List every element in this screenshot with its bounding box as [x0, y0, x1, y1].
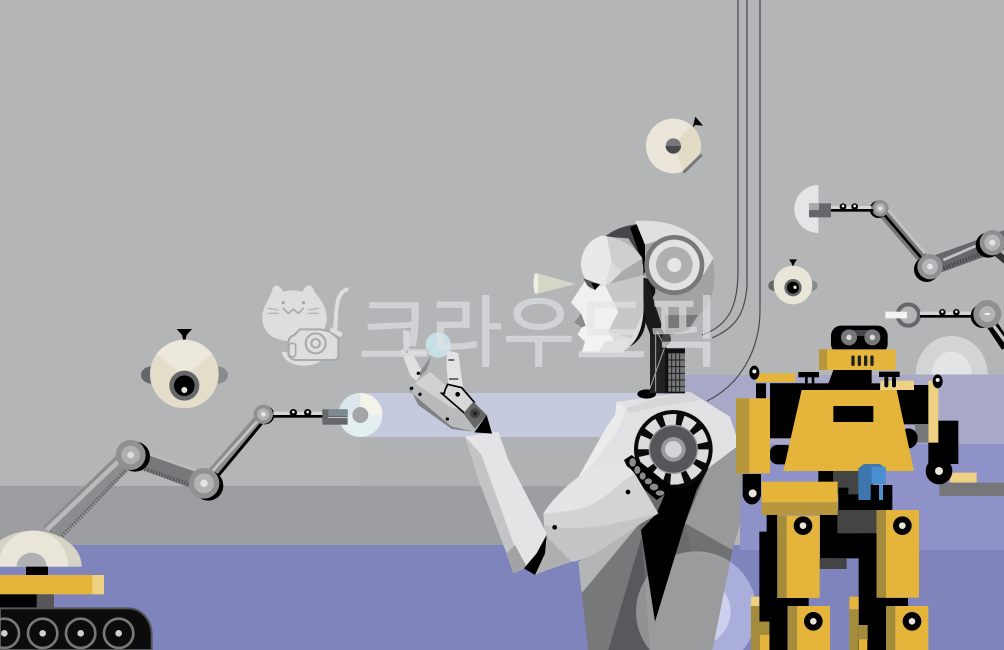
- tank track: [0, 608, 152, 650]
- gripper holding disc: [273, 393, 382, 437]
- palm: [408, 372, 475, 432]
- robot shoulders and upper torso: [749, 366, 929, 438]
- helmet: [605, 221, 715, 337]
- ear disc: [644, 235, 704, 295]
- robot right arm: [899, 374, 1004, 496]
- forearm: [465, 432, 547, 575]
- watermark logo: [262, 285, 720, 377]
- tank body: [0, 567, 104, 608]
- robot left arm: [736, 398, 793, 504]
- yellow robot and right arms: [736, 185, 1004, 650]
- neck: [632, 322, 685, 399]
- flying eye bot left: [141, 329, 228, 408]
- robot black leg frame: [759, 515, 908, 650]
- robot hand: [401, 330, 492, 434]
- robot right shin: [849, 597, 928, 650]
- robot head: [819, 326, 896, 387]
- arm joints: [116, 405, 274, 501]
- robot left shin: [751, 597, 830, 650]
- floating disc top: [646, 117, 710, 185]
- watermark cat with camera: [262, 285, 347, 366]
- lower right arm: [885, 300, 1004, 347]
- hanging wires: [702, 0, 760, 401]
- robot chest plate: [783, 390, 914, 471]
- robot pelvis: [818, 464, 892, 569]
- head: [571, 221, 715, 399]
- robot right thigh: [877, 510, 919, 598]
- jaw hardware: [618, 278, 671, 349]
- robot lap block: [762, 482, 838, 515]
- base dome: [0, 531, 82, 567]
- small flying eye bot: [768, 259, 818, 304]
- glass ball: [426, 332, 451, 358]
- torso shell: [577, 392, 757, 650]
- fingers: [401, 330, 463, 390]
- watermark text: 크라우드픽: [358, 289, 720, 377]
- face: [571, 236, 644, 352]
- robot left thigh: [777, 516, 820, 598]
- upper right arm: [794, 185, 1004, 282]
- upper arm: [535, 463, 658, 575]
- translucent lower sphere: [636, 551, 757, 650]
- shoulder beads: [624, 455, 673, 500]
- wrist: [463, 402, 492, 434]
- chest gear: [634, 410, 713, 489]
- yellow robot: [736, 326, 1004, 650]
- chest black wedge: [641, 468, 708, 622]
- left tracked robot arm: [0, 329, 382, 650]
- eye light cone: [534, 273, 576, 294]
- arm segments: [47, 415, 263, 538]
- central humanoid torso: [535, 392, 757, 650]
- right background semicircle: [916, 336, 988, 374]
